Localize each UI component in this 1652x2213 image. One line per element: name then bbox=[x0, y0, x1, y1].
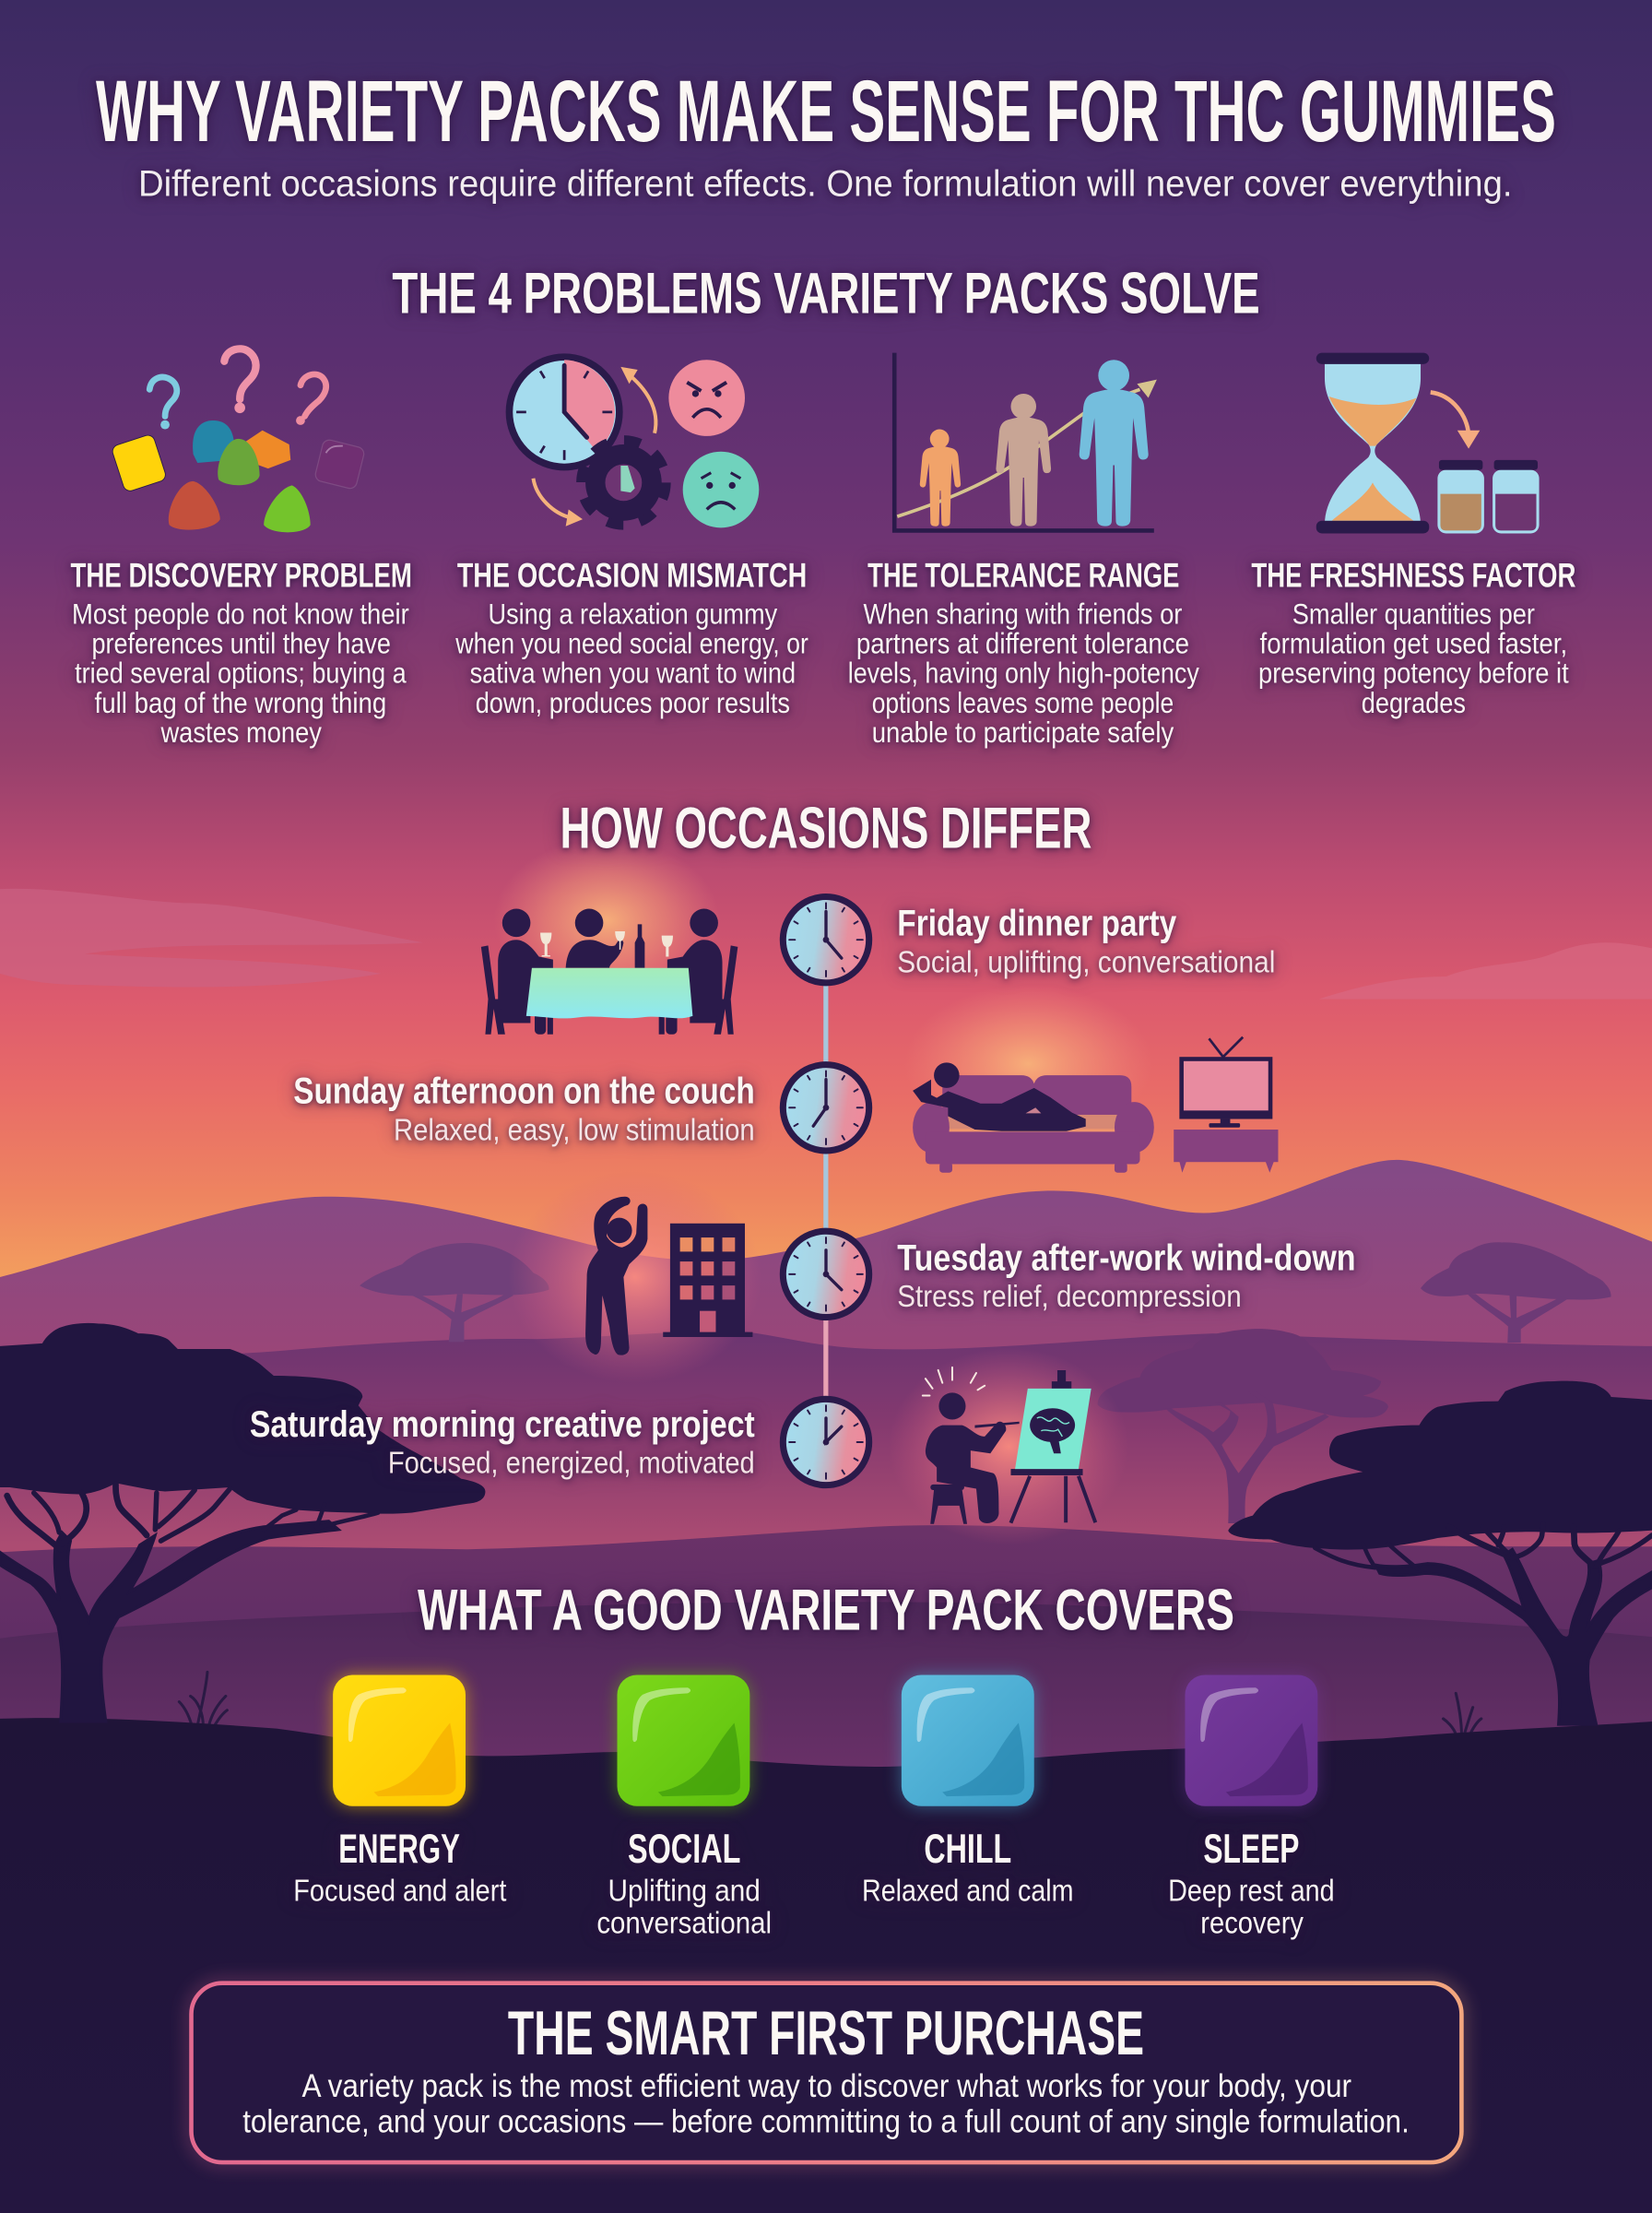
callout body: tolerance, and your occasions — before committing to a full count of any single formulation. bbox=[242, 2103, 1410, 2139]
icon: hourglass and jars bbox=[1316, 353, 1540, 533]
callout body bbox=[242, 2068, 1410, 2139]
occasion text: friday dinner party: Social, uplifting, conversational bbox=[897, 945, 1275, 979]
problem text: the occasion mismatch: Using a relaxation gummy bbox=[488, 598, 777, 630]
subtitle: Different occasions require different effects. One formulation will never cover everything. bbox=[138, 164, 1512, 205]
label: social: conversational bbox=[596, 1906, 772, 1940]
problem text: the tolerance range: When sharing with friends or bbox=[864, 598, 1182, 630]
foreground acacia tree right bbox=[1228, 1381, 1652, 1724]
illustration: artist painting a brain bbox=[923, 1367, 1095, 1524]
problem text: the tolerance range: THE TOLERANCE RANGE bbox=[867, 557, 1179, 595]
gummy: sleep bbox=[1185, 1675, 1317, 1806]
occasion text: friday dinner party: Friday dinner party bbox=[897, 904, 1176, 944]
problem text: the tolerance range: unable to participate safely bbox=[872, 716, 1174, 749]
problem text: the freshness factor: degrades bbox=[1362, 687, 1466, 719]
label: energy: ENERGY bbox=[338, 1827, 460, 1872]
occasion text: sunday afternoon: Sunday afternoon on the couch bbox=[293, 1071, 755, 1112]
occasion text: saturday creative: Saturday morning creative project bbox=[250, 1404, 755, 1445]
problem text: the occasion mismatch bbox=[454, 557, 808, 719]
callout body: A variety pack is the most efficient way to discover what works for your body, your bbox=[301, 2068, 1351, 2104]
problem text: the discovery problem: THE DISCOVERY PROBLEM bbox=[71, 557, 412, 595]
problem text: the tolerance range: options leaves some people bbox=[872, 687, 1174, 719]
callout heading: THE SMART FIRST PURCHASE bbox=[508, 1999, 1144, 2068]
label: sleep: Deep rest and bbox=[1168, 1873, 1335, 1907]
occasion text: sunday afternoon bbox=[293, 1071, 755, 1147]
clock: friday bbox=[783, 897, 869, 983]
problem text: the occasion mismatch: down, produces poor results bbox=[476, 687, 790, 719]
callout: the smart first purchase bbox=[192, 1983, 1461, 2162]
distant tree right bbox=[1421, 1242, 1611, 1343]
gummy: chill bbox=[902, 1675, 1034, 1806]
problem text: the occasion mismatch: when you need social energy, or bbox=[454, 628, 808, 660]
label: energy bbox=[293, 1827, 506, 1907]
label: sleep: recovery bbox=[1200, 1906, 1304, 1940]
occasion text: tuesday wind-down: Stress relief, decompression bbox=[897, 1280, 1242, 1314]
problem text: the freshness factor: preserving potency before it bbox=[1258, 657, 1569, 690]
label: chill bbox=[862, 1827, 1074, 1907]
label: chill: Relaxed and calm bbox=[862, 1873, 1074, 1907]
illustration: couch and tv bbox=[913, 1037, 1278, 1173]
clock: saturday bbox=[783, 1399, 869, 1485]
occasion text: friday dinner party bbox=[897, 904, 1275, 979]
distant tree left bbox=[360, 1243, 549, 1342]
label: social bbox=[596, 1827, 772, 1940]
icon: occasion mismatch clock, gear and faces bbox=[509, 357, 759, 527]
illustration: stretching person and office building bbox=[585, 1197, 752, 1355]
glow behind illustrations bbox=[494, 838, 719, 1002]
faded mid tree bbox=[1098, 1329, 1388, 1523]
problem text: the freshness factor: Smaller quantities per bbox=[1292, 598, 1535, 630]
occasion text: tuesday wind-down bbox=[897, 1237, 1356, 1314]
problem text: the tolerance range: levels, having only high-potency bbox=[848, 657, 1199, 690]
problem text: the freshness factor bbox=[1251, 557, 1575, 719]
occasion text: tuesday wind-down: Tuesday after-work wind-down bbox=[897, 1237, 1356, 1278]
heading: what a good variety pack covers: WHAT A GOOD VARIETY PACK COVERS bbox=[418, 1579, 1234, 1643]
clock: sunday bbox=[783, 1065, 869, 1151]
clock: tuesday bbox=[783, 1231, 869, 1318]
label: chill: CHILL bbox=[924, 1827, 1011, 1872]
problem text: the tolerance range: partners at different tolerance bbox=[856, 628, 1189, 660]
occasion text: sunday afternoon: Relaxed, easy, low stimulation bbox=[394, 1113, 755, 1147]
label: social: SOCIAL bbox=[628, 1827, 740, 1872]
occasion text: saturday creative bbox=[250, 1404, 755, 1481]
problem text: the discovery problem: wastes money bbox=[160, 716, 322, 749]
foreground acacia tree left bbox=[0, 1323, 485, 1722]
problem text: the tolerance range bbox=[848, 557, 1199, 749]
label: sleep: SLEEP bbox=[1203, 1827, 1299, 1872]
label: sleep bbox=[1168, 1827, 1335, 1940]
illustration: dinner party bbox=[481, 909, 738, 1035]
problem text: the discovery problem: preferences until they have bbox=[91, 628, 391, 660]
gummy: social bbox=[618, 1675, 749, 1806]
problem text: the freshness factor: formulation get used faster, bbox=[1260, 628, 1567, 660]
problem text: the discovery problem bbox=[71, 557, 412, 749]
problem text: the occasion mismatch: sativa when you want to wind bbox=[470, 657, 796, 690]
problem text: the occasion mismatch: THE OCCASION MISMATCH bbox=[457, 557, 807, 595]
problem text: the discovery problem: tried several options; buying a bbox=[75, 657, 407, 690]
icon: gummies and question marks bbox=[111, 349, 365, 532]
label: energy: Focused and alert bbox=[293, 1873, 506, 1907]
heading: how occasions differ: HOW OCCASIONS DIFFER bbox=[560, 797, 1092, 861]
label: social: Uplifting and bbox=[608, 1873, 761, 1907]
timeline line bbox=[823, 974, 828, 1426]
problem text: the discovery problem: Most people do not know their bbox=[72, 598, 409, 630]
problem text: the discovery problem: full bag of the wrong thing bbox=[95, 687, 386, 719]
icon: tolerance range chart with people bbox=[894, 353, 1157, 530]
occasion text: saturday creative: Focused, energized, motivated bbox=[388, 1447, 755, 1481]
heading: the 4 problems: THE 4 PROBLEMS VARIETY PACKS SOLVE bbox=[392, 262, 1260, 326]
grass tufts bbox=[179, 1672, 1481, 1734]
gummy: energy bbox=[333, 1675, 466, 1806]
